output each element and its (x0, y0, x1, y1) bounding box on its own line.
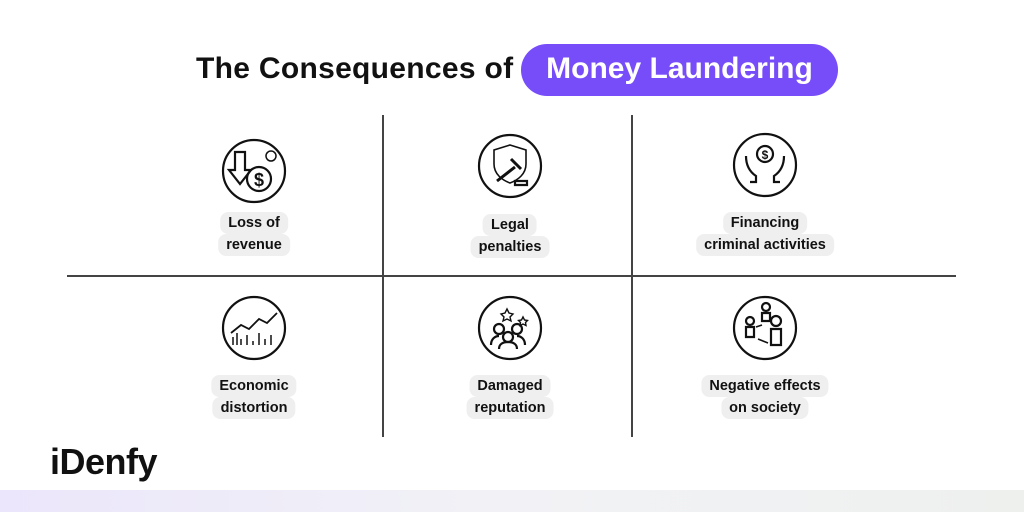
label: negative effects on society: on society (729, 400, 801, 416)
icon: damaged reputation (478, 296, 542, 360)
label: financing criminal activities: criminal activities (704, 237, 826, 253)
bottom band (0, 490, 1024, 512)
label: loss of revenue: Loss of (228, 215, 280, 231)
icon: financing criminal activities (732, 132, 798, 198)
title highlight pill: Money Laundering (546, 52, 813, 85)
title text: The Consequences of (196, 52, 513, 85)
label: loss of revenue: revenue (226, 237, 282, 253)
title highlight pill (521, 44, 838, 96)
title (196, 44, 838, 96)
icon: legal penalties (478, 134, 542, 198)
icon: negative effects on society (732, 296, 798, 360)
label: damaged reputation: Damaged (477, 378, 543, 394)
icon: loss of revenue: $ (254, 170, 264, 190)
label: loss of revenue (218, 212, 290, 256)
label: economic distortion: distortion (221, 400, 287, 416)
label: financing criminal activities: Financing (731, 215, 799, 231)
label: damaged reputation: reputation (475, 400, 545, 416)
icon: economic distortion (222, 296, 286, 360)
label: damaged reputation (466, 375, 554, 419)
logo: iDenfy (50, 441, 157, 482)
label: negative effects on society (702, 375, 828, 419)
label: legal penalties (470, 214, 550, 258)
label: negative effects on society: Negative effects (709, 378, 821, 394)
label: economic distortion: Economic (219, 378, 289, 394)
label: legal penalties: Legal (491, 217, 529, 233)
label: financing criminal activities (696, 212, 834, 256)
icon: financing criminal activities: $ (762, 148, 769, 162)
label: economic distortion (212, 375, 296, 419)
label: legal penalties: penalties (479, 239, 541, 255)
icon: loss of revenue (222, 138, 286, 204)
